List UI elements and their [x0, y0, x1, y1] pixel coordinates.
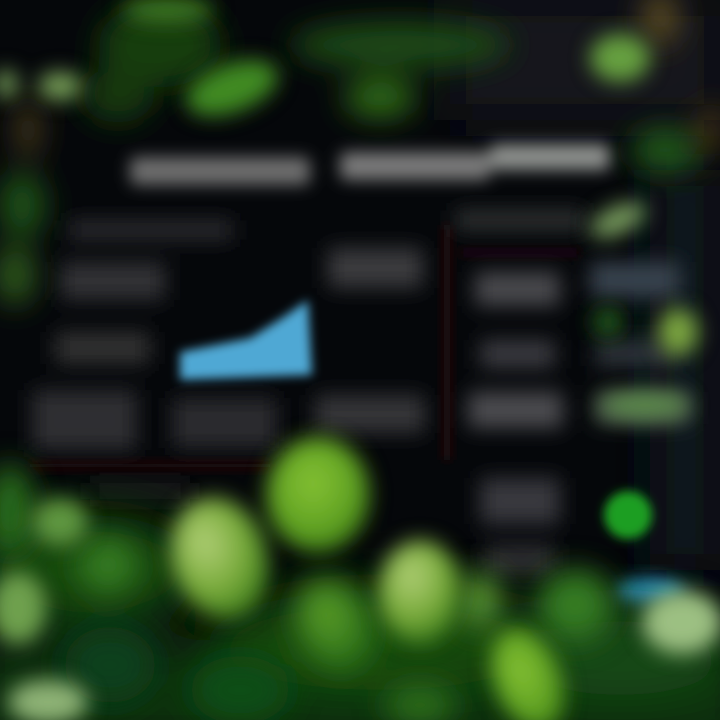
icon: green status dot	[604, 491, 652, 539]
table panel: middle column	[90, 248, 425, 500]
table panel: left column	[32, 220, 233, 450]
upper foliage	[0, 0, 720, 418]
icon: blue accent bottom right	[616, 578, 684, 606]
dark green leaf base	[0, 515, 720, 720]
foreground foliage	[0, 437, 720, 720]
chart: blue area shape	[180, 300, 312, 380]
bright leaves	[0, 437, 720, 720]
title bar	[130, 144, 610, 185]
mid leaves	[0, 464, 613, 720]
table panel: right columns	[455, 210, 690, 575]
dark red table rules	[30, 225, 580, 469]
